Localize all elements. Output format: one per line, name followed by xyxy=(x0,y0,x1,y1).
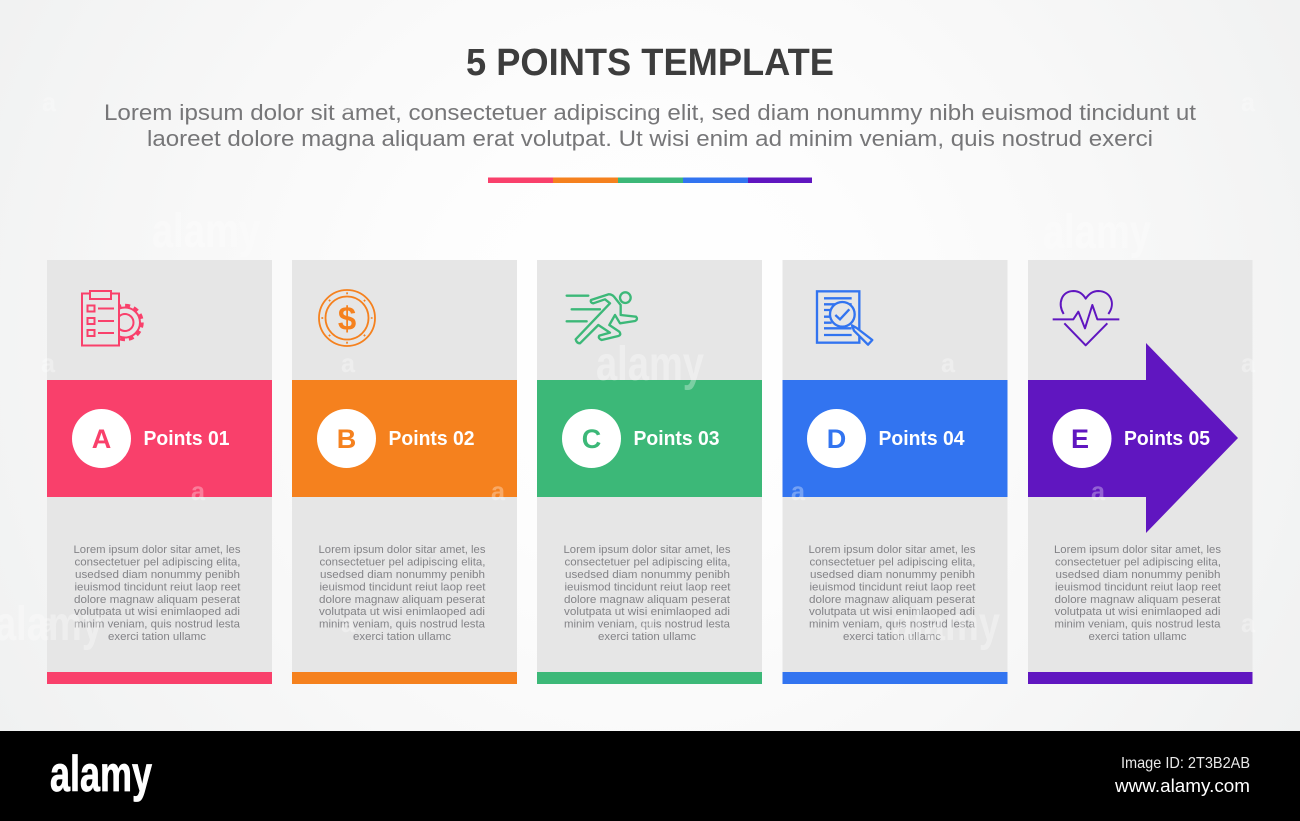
body text D: volutpata ut wisi enimlaoped adi xyxy=(809,606,975,618)
body text D: usedsed diam nonummy penibh xyxy=(810,569,975,581)
body text C: consectetuer pel adipiscing elita, xyxy=(564,556,730,568)
icon: checklist with gear xyxy=(82,291,142,346)
icon: document with magnifier xyxy=(817,291,872,345)
multicolour divider xyxy=(488,178,812,183)
colour band A xyxy=(47,380,272,497)
watermarks: alamy xyxy=(1043,206,1151,259)
watermarks: a xyxy=(641,608,656,638)
body text A: minim veniam, quis nostrud lesta xyxy=(74,618,241,630)
body text A: volutpata ut wisi enimlaoped adi xyxy=(74,606,240,618)
body text E: dolore magnaw aliquam peserat xyxy=(1054,594,1220,606)
watermarks: a xyxy=(641,87,656,117)
watermarks: a xyxy=(491,476,506,506)
badge D xyxy=(807,409,866,468)
badge C xyxy=(562,409,621,468)
body text B: minim veniam, quis nostrud lesta xyxy=(319,618,486,630)
body text E: usedsed diam nonummy penibh xyxy=(1056,569,1220,581)
watermarks: a xyxy=(1241,348,1256,378)
body text B: volutpata ut wisi enimlaoped adi xyxy=(319,606,485,618)
title: 5 POINTS TEMPLATE xyxy=(466,42,834,84)
badge A: A xyxy=(92,424,111,454)
label A: Points 01 xyxy=(144,428,230,450)
body text B: consectetuer pel adipiscing elita, xyxy=(320,556,486,568)
body text A: usedsed diam nonummy penibh xyxy=(75,569,240,581)
body text B: Lorem ipsum dolor sitar amet, les xyxy=(318,544,486,556)
watermarks: a xyxy=(1091,476,1106,506)
body text E: volutpata ut wisi enimlaoped adi xyxy=(1054,606,1220,618)
body text A: ieuismod tincidunt reiut laop reet xyxy=(74,582,240,594)
body text E xyxy=(1054,544,1222,643)
icon: dollar coin xyxy=(319,290,375,346)
footer logo: alamy xyxy=(50,746,152,802)
body text D: consectetuer pel adipiscing elita, xyxy=(810,556,976,568)
body text C xyxy=(564,544,731,643)
body text E: consectetuer pel adipiscing elita, xyxy=(1055,556,1221,568)
subtitle text block: Lorem ipsum dolor sit amet, consectetuer adipiscing elit, sed diam nonummy nibh euismod tincidunt ut xyxy=(104,100,1196,125)
body text B: dolore magnaw aliquam peserat xyxy=(319,594,485,606)
badge E: E xyxy=(1071,424,1089,454)
body text B: usedsed diam nonummy penibh xyxy=(320,569,485,581)
label B: Points 02 xyxy=(388,428,474,450)
badge C: C xyxy=(582,424,601,454)
badge D: D xyxy=(827,424,846,454)
colour band C xyxy=(537,380,762,497)
watermarks: a xyxy=(341,608,356,638)
body text A: Lorem ipsum dolor sitar amet, les xyxy=(74,544,241,556)
watermarks: a xyxy=(1241,87,1256,117)
badge B: B xyxy=(337,424,356,454)
body text D: ieuismod tincidunt reiut laop reet xyxy=(810,582,976,594)
subtitle text block xyxy=(104,100,1196,151)
watermarks: a xyxy=(941,348,956,378)
body text D: minim veniam, quis nostrud lesta xyxy=(809,618,976,630)
body text E: Lorem ipsum dolor sitar amet, les xyxy=(1054,544,1222,556)
label D: Points 04 xyxy=(878,428,965,450)
watermarks: a xyxy=(41,348,56,378)
arrow band E xyxy=(1028,343,1238,533)
bottom bar B xyxy=(292,672,517,684)
website: www.alamy.com xyxy=(1114,776,1250,796)
body text D: dolore magnaw aliquam peserat xyxy=(809,594,975,606)
bottom bar D xyxy=(782,672,1008,684)
colour band B xyxy=(292,380,517,497)
body text A: exerci tation ullamc xyxy=(108,631,207,643)
label C: Points 03 xyxy=(634,428,720,450)
body text A: consectetuer pel adipiscing elita, xyxy=(74,556,241,568)
watermarks: a xyxy=(341,87,356,117)
panel: point D xyxy=(782,260,1008,684)
watermarks: a xyxy=(41,608,56,638)
bottom bar C xyxy=(537,672,762,684)
body text C: dolore magnaw aliquam peserat xyxy=(564,594,730,606)
body text C: volutpata ut wisi enimlaoped adi xyxy=(564,606,730,618)
body text B: ieuismod tincidunt reiut laop reet xyxy=(320,582,486,594)
body text E: minim veniam, quis nostrud lesta xyxy=(1054,618,1221,630)
body text E: exerci tation ullamc xyxy=(1088,631,1187,643)
watermarks: alamy xyxy=(152,205,260,258)
body text E: ieuismod tincidunt reiut laop reet xyxy=(1055,582,1221,594)
body text A: dolore magnaw aliquam peserat xyxy=(74,594,240,606)
badge A xyxy=(72,409,131,468)
watermarks: alamy xyxy=(596,338,704,391)
badge E xyxy=(1052,409,1112,468)
panel: point A xyxy=(47,260,272,684)
body text D: exerci tation ullamc xyxy=(843,631,942,643)
body text C: usedsed diam nonummy penibh xyxy=(565,569,730,581)
label E: Points 05 xyxy=(1124,428,1210,450)
body text B: exerci tation ullamc xyxy=(353,631,452,643)
watermarks: a xyxy=(791,476,806,506)
bottom bar A xyxy=(47,672,272,684)
icon: dollar coin: $ xyxy=(338,300,356,337)
body text A xyxy=(74,544,241,643)
body text C: minim veniam, quis nostrud lesta xyxy=(564,618,731,630)
watermarks: a xyxy=(341,348,356,378)
watermarks xyxy=(0,87,1256,651)
watermarks: a xyxy=(191,476,206,506)
body text D xyxy=(808,544,976,643)
panel: point C xyxy=(537,260,762,684)
icon: running figure xyxy=(567,292,637,343)
watermarks: alamy xyxy=(892,598,1000,651)
body text C: exerci tation ullamc xyxy=(598,631,697,643)
watermarks: a xyxy=(1241,608,1256,638)
panel: point E xyxy=(1028,260,1252,684)
image ID: Image ID: 2T3B2AB xyxy=(1121,755,1250,772)
watermarks: a xyxy=(42,87,57,117)
subtitle text block: laoreet dolore magna aliquam erat volutpat. Ut wisi enim ad minim veniam, quis nostrud exerci xyxy=(147,126,1153,151)
badge B xyxy=(317,409,376,468)
footer bar xyxy=(0,731,1300,821)
panel: point B xyxy=(292,260,517,684)
body text C: ieuismod tincidunt reiut laop reet xyxy=(564,582,730,594)
icon: heart with pulse xyxy=(1053,291,1119,345)
body text B xyxy=(318,544,486,643)
colour band D xyxy=(782,380,1008,497)
body text C: Lorem ipsum dolor sitar amet, les xyxy=(564,544,731,556)
bottom bar E xyxy=(1028,672,1252,684)
body text D: Lorem ipsum dolor sitar amet, les xyxy=(808,544,976,556)
